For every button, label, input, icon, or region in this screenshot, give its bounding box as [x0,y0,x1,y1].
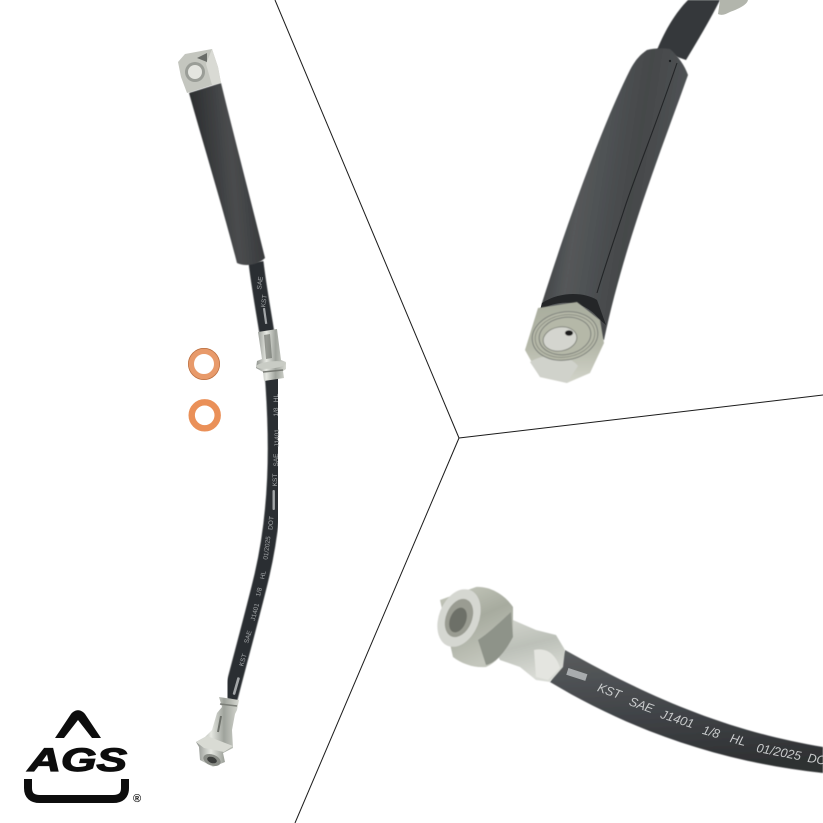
upper hose section [657,0,720,60]
logo top chevron [55,710,101,738]
hose body [230,262,275,699]
hose printed markings: KST [260,294,269,308]
close-up banjo nut [525,302,604,383]
hose printed markings: HL [259,570,268,580]
hose printed markings: DOT [267,516,276,530]
centre crimp ferrule [256,329,286,381]
close-up threaded fitting [429,583,565,682]
close-up sleeve [540,48,688,340]
heat shrink sleeve [189,83,265,265]
close-up hose print: HL [729,731,748,749]
top fitting fragment [718,0,748,15]
registered mark: ® [133,793,141,805]
divider lines between panels [275,0,823,823]
close-up hose [550,650,823,773]
sleeve end band [540,294,606,325]
hose printed markings: 01/2025 [263,536,272,560]
hose printed markings: SAE [243,629,254,644]
close-up hose print: KST [596,681,624,702]
sleeve seam [597,63,677,293]
copper washer, upper [188,348,220,380]
hose printed markings: J1401 [274,429,281,447]
close-up hose print: 01/2025 [755,741,802,763]
logo bottom bracket [28,779,125,799]
panel: sleeve and banjo close-up [525,0,748,383]
close-up hose print: J1401 [658,707,696,731]
panel: threaded end close-up [429,583,823,773]
logo wordmark: AGS [27,742,128,778]
AGS logo [27,710,141,805]
hose printed markings: HL [273,393,280,402]
hose printed markings: 1/8 [255,587,264,597]
close-up hose print [566,668,823,769]
hose printed markings [233,275,281,695]
hose printed markings: SAE [273,453,280,467]
panel: full hose assembly [178,49,286,768]
hose printed markings: 1/8 [273,407,280,417]
close-up hose print: SAE [627,694,656,716]
hose printed markings: SAE [256,275,265,290]
hose printed markings: KST [272,474,279,486]
close-up hose print: 1/8 [701,723,721,741]
bottom threaded fitting [196,697,239,768]
hose printed markings: J1401 [250,602,261,622]
hose printed markings: KST [238,653,249,667]
top banjo fitting [178,49,221,93]
copper washer, lower [192,402,218,428]
